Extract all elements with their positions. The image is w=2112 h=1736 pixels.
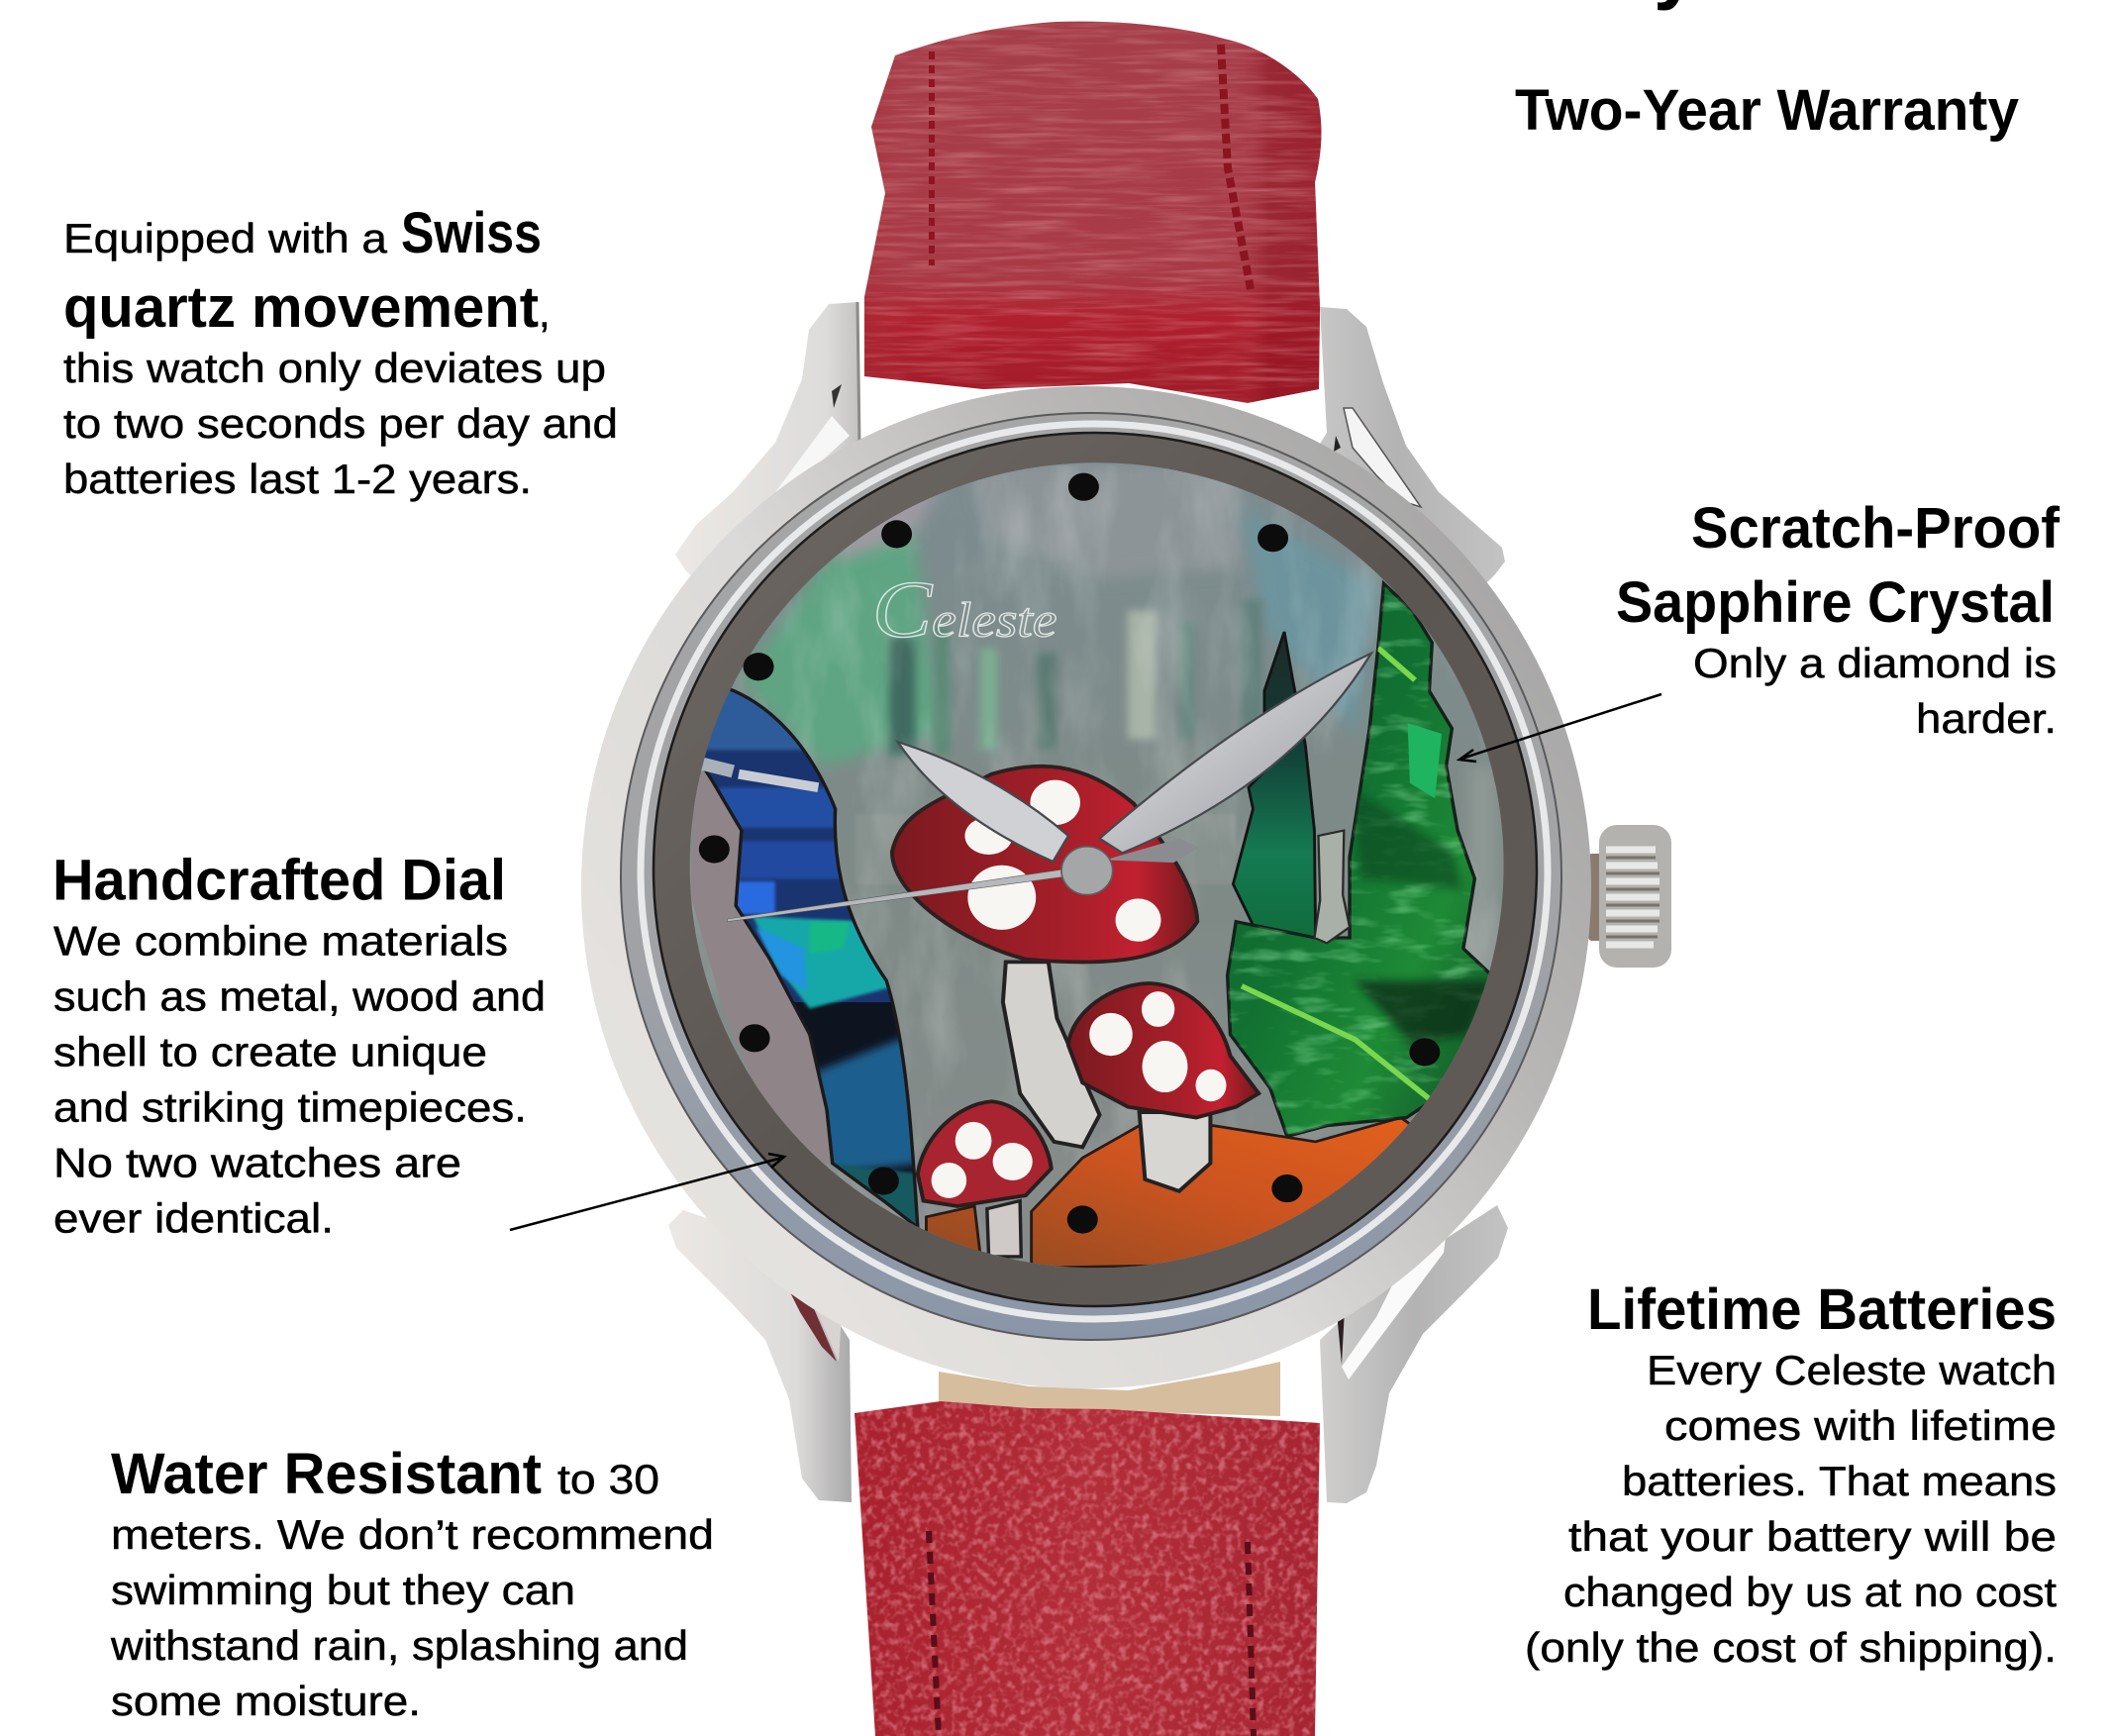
lug: top left <box>675 302 891 594</box>
blue shell wave <box>703 689 918 1227</box>
text: water resistant: some moisture. <box>111 1678 421 1724</box>
text: Swiss quartz movement: quartz movement <box>63 275 539 340</box>
center pin <box>1061 847 1113 895</box>
text: Swiss quartz movement: this watch only deviates up <box>63 345 606 391</box>
small mushroom stem <box>987 1201 1021 1257</box>
text: handcrafted dial: Handcrafted Dial <box>52 848 506 912</box>
minute hand <box>1099 654 1371 853</box>
seconds hand <box>728 869 1065 922</box>
text: handcrafted dial: such as metal, wood and <box>53 972 546 1019</box>
medium mushroom cap <box>1068 983 1258 1118</box>
small tree <box>1233 632 1316 949</box>
text: water resistant: meters. We don’t recommend <box>111 1511 714 1558</box>
small mushroom spots <box>932 1122 1033 1198</box>
text: handcrafted dial: and striking timepieces. <box>53 1083 527 1130</box>
crown <box>1588 825 1671 968</box>
text: lifetime batteries: Lifetime Batteries <box>1587 1277 2057 1342</box>
bezel steel ring <box>621 413 1561 1340</box>
text: lifetime batteries: batteries. That means <box>1622 1458 2057 1504</box>
text: scratch-proof sapphire crystal: Sapphire Crystal <box>1616 570 2055 635</box>
heading: two-year warranty: Two-Year Warranty <box>1515 78 2019 143</box>
text: water resistant: to 30 <box>557 1456 659 1502</box>
bezel highlight <box>641 424 1548 1319</box>
text: handcrafted dial: No two watches are <box>53 1139 461 1185</box>
watch <box>581 10 1671 1736</box>
brand logo: Celeste <box>872 565 1056 655</box>
shell highlight <box>739 774 818 787</box>
text: handcrafted dial: ever identical. <box>53 1194 334 1241</box>
hour markers <box>699 473 1440 1234</box>
text: scratch-proof sapphire crystal: Only a diamond is <box>1693 640 2057 686</box>
medium mushroom spots <box>1089 991 1227 1101</box>
text: lifetime batteries: Every Celeste watch <box>1647 1347 2057 1393</box>
lug: top right <box>1287 307 1505 614</box>
text: Swiss quartz movement: Swiss <box>401 201 542 265</box>
text: scratch-proof sapphire crystal: harder. <box>1916 695 2057 742</box>
mother of pearl streaks <box>673 465 1526 1271</box>
hands <box>728 654 1371 922</box>
mother of pearl left band <box>690 766 833 1164</box>
text: handcrafted dial <box>52 848 546 1241</box>
text: lifetime batteries <box>1525 1277 2057 1671</box>
text: scratch-proof sapphire crystal <box>1616 496 2061 742</box>
text: Swiss quartz movement: Equipped with a <box>63 215 388 261</box>
big mushroom spots <box>964 780 1160 942</box>
tree highlights <box>1228 586 1487 1135</box>
big mushroom stem <box>1003 962 1099 1147</box>
big mushroom cap <box>892 766 1197 963</box>
text: water resistant: Water Resistant <box>111 1442 542 1506</box>
dial <box>673 462 1526 1271</box>
dial plate <box>690 462 1504 1268</box>
top strap <box>864 22 1321 403</box>
text: scratch-proof sapphire crystal: Scratch-Proof <box>1691 496 2061 561</box>
text: Swiss quartz movement <box>63 201 618 502</box>
spring bar <box>939 1362 1280 1416</box>
arrow: handcrafted dial <box>510 1154 784 1230</box>
text: Swiss quartz movement: to two seconds per day and <box>63 400 618 447</box>
hour hand tail <box>1105 839 1199 863</box>
lug: bottom left <box>668 1210 852 1502</box>
text: water resistant <box>110 1442 714 1724</box>
arrow: sapphire crystal <box>1459 694 1661 762</box>
dark chapter ring <box>654 433 1537 1306</box>
text: lifetime batteries: comes with lifetime <box>1664 1402 2057 1449</box>
text: water resistant: withstand rain, splashing and <box>110 1622 688 1669</box>
bottom strap <box>842 1396 1337 1736</box>
hour hand <box>898 742 1068 862</box>
text: handcrafted dial: We combine materials <box>53 917 508 964</box>
pale gap in tree <box>1314 831 1350 943</box>
text: lifetime batteries: that your battery will be <box>1568 1513 2057 1560</box>
green shell tree <box>1228 583 1492 1137</box>
small mushroom cap <box>918 1101 1052 1206</box>
orange ground <box>926 1118 1412 1268</box>
medium mushroom stem <box>1140 1112 1210 1191</box>
text: lifetime batteries: (only the cost of shipping). <box>1525 1624 2057 1671</box>
text: water resistant: swimming but they can <box>111 1567 575 1613</box>
text: lifetime batteries: changed by us at no cost <box>1563 1569 2057 1615</box>
text: handcrafted dial: shell to create unique <box>53 1028 487 1074</box>
text: Swiss quartz movement: batteries last 1-2 years. <box>63 456 532 502</box>
text: Swiss quartz movement: , <box>539 289 551 336</box>
lug: bottom right <box>1320 1205 1508 1503</box>
case body <box>581 386 1591 1388</box>
